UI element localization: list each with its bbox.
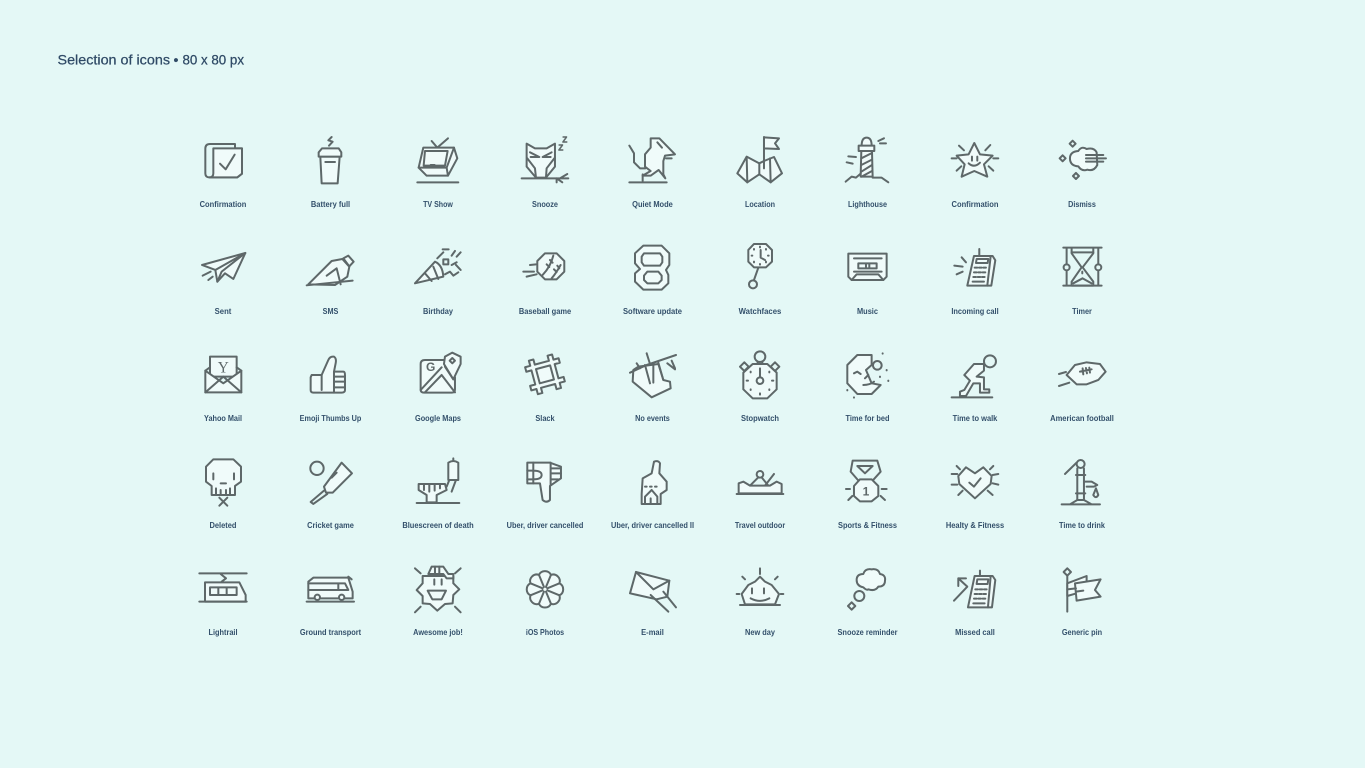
label: Time to walk: Time to walk: [953, 413, 998, 423]
icon: Time to drink water pump: [1062, 460, 1100, 504]
icon: Sports and Fitness medal: [846, 461, 887, 501]
icon: Confirmation pages: [205, 144, 242, 177]
icon: E-mail envelope: [630, 572, 676, 612]
label: Travel outdoor: Travel outdoor: [735, 520, 786, 530]
icon: Confirmation star: [952, 143, 998, 177]
icon: Uber driver cancelled II finger: [642, 461, 667, 504]
label: Generic pin: Generic pin: [1062, 627, 1102, 637]
label: iOS Photos: iOS Photos: [526, 627, 564, 637]
icon: No events sloth: [630, 353, 676, 397]
label: No events: No events: [635, 413, 670, 423]
label: Sent: Sent: [215, 306, 232, 316]
icon: Bluescreen of death toilet: [417, 458, 459, 503]
icon: New day sunrise: [737, 568, 783, 605]
icon: Emoji Thumbs Up: [311, 357, 345, 393]
label: E-mail: E-mail: [641, 627, 664, 637]
icon: Yahoo Mail envelope: Y: [218, 360, 229, 377]
label: Awesome job!: Awesome job!: [413, 627, 463, 637]
icon: Lighthouse: [846, 138, 888, 182]
icon: Dismiss cloud: [1060, 141, 1106, 179]
label: SMS: SMS: [323, 306, 339, 316]
icon: Incoming call phone: [954, 249, 995, 286]
label: Google Maps: Google Maps: [415, 413, 461, 423]
label: Missed call: Missed call: [955, 627, 995, 637]
label: Deleted: Deleted: [210, 520, 236, 530]
label: Lighthouse: Lighthouse: [848, 199, 887, 209]
icon: SMS bottle: [307, 256, 354, 285]
label: American football: American football: [1050, 413, 1114, 423]
label: Location: Location: [745, 199, 775, 209]
icon: American football: [1059, 362, 1106, 386]
icon: Awesome job badge: [415, 567, 461, 612]
label: Time to drink: Time to drink: [1059, 520, 1105, 530]
icon: Slack hash: [524, 353, 566, 396]
label: Software update: Software update: [623, 306, 682, 316]
icon: Snooze owl: [522, 135, 568, 182]
icon: Time for bed moon: [847, 353, 888, 398]
label: Uber, driver cancelled: Uber, driver cancelled: [507, 520, 583, 530]
icon: Lightrail tram: [199, 573, 247, 602]
label: Stopwatch: Stopwatch: [741, 413, 779, 423]
label: Incoming call: Incoming call: [951, 306, 999, 316]
label: Watchfaces: Watchfaces: [739, 306, 782, 316]
icon: TV Show: [417, 138, 458, 182]
label: Confirmation: Confirmation: [200, 199, 246, 209]
icon: Software update figure eight: [635, 246, 669, 290]
label: Music: Music: [857, 306, 878, 316]
icon: Stopwatch: [740, 351, 779, 398]
icon: Time to walk figure: [952, 355, 996, 397]
label: Bluescreen of death: Bluescreen of death: [402, 520, 474, 530]
title: 80 x 80 px: [182, 52, 244, 68]
icon: Quiet Mode mouse: [629, 138, 675, 182]
icon: Battery full cup: [319, 137, 341, 183]
title: Selection of icons: [58, 52, 170, 68]
icon: Generic pin flags: [1064, 568, 1101, 612]
label: Snooze: Snooze: [532, 199, 558, 209]
label: Timer: Timer: [1072, 306, 1092, 316]
label: Uber, driver cancelled II: Uber, driver cancelled II: [611, 520, 694, 530]
icon: Yahoo Mail envelope: [205, 357, 241, 392]
label: Ground transport: Ground transport: [300, 627, 361, 637]
icon: Ground transport bus: [307, 577, 354, 602]
title: •: [174, 52, 178, 68]
icon: Sent paper plane: [202, 253, 245, 282]
icon: Travel outdoor canoe: [737, 471, 783, 494]
icon: Google Maps: G: [426, 360, 435, 374]
icon: Deleted skull: [206, 459, 241, 506]
icon: Snooze owl: Z: [562, 135, 567, 145]
icon: Birthday party popper: [415, 249, 461, 283]
label: TV Show: TV Show: [423, 199, 453, 209]
label: Sports & Fitness: Sports & Fitness: [838, 520, 897, 530]
label: Lightrail: Lightrail: [208, 627, 238, 637]
label: New day: New day: [745, 627, 775, 637]
label: Healty & Fitness: Healty & Fitness: [946, 520, 1004, 530]
label: Emoji Thumbs Up: Emoji Thumbs Up: [300, 413, 361, 423]
label: Baseball game: Baseball game: [519, 306, 571, 316]
icon: Google Maps: [421, 353, 461, 393]
icon: Snooze reminder thought cloud: [848, 569, 885, 610]
label: Cricket game: Cricket game: [307, 520, 354, 530]
icon: Snooze owl: Z: [558, 143, 563, 153]
icon: Baseball game: [523, 253, 564, 279]
icon: Cricket game bat and ball: [310, 462, 352, 504]
label: Yahoo Mail: Yahoo Mail: [204, 413, 242, 423]
label: Confirmation star: Confirmation: [952, 199, 998, 209]
icon: Music cassette: [848, 254, 887, 280]
icon: Uber driver cancelled thumb down: [527, 463, 561, 502]
icon: Healty and Fitness heart: [952, 466, 998, 498]
label: Dismiss: Dismiss: [1068, 199, 1096, 209]
icon: Location map and flag: [737, 137, 782, 182]
icon: Sports and Fitness medal: 1: [863, 484, 870, 498]
label: Slack: Slack: [535, 413, 555, 423]
label: Battery full: Battery full: [311, 199, 350, 209]
icon: Missed call phone and arrow: [954, 571, 995, 607]
label: Time for bed: Time for bed: [846, 413, 890, 423]
label: Birthday: Birthday: [423, 306, 453, 316]
label: Quiet Mode: Quiet Mode: [632, 199, 673, 209]
icon: Watchfaces pendulum: [748, 244, 772, 288]
icon: Timer hourglass: [1063, 248, 1102, 286]
icon: iOS Photos flower: [527, 571, 563, 608]
label: Snooze reminder: Snooze reminder: [838, 627, 898, 637]
